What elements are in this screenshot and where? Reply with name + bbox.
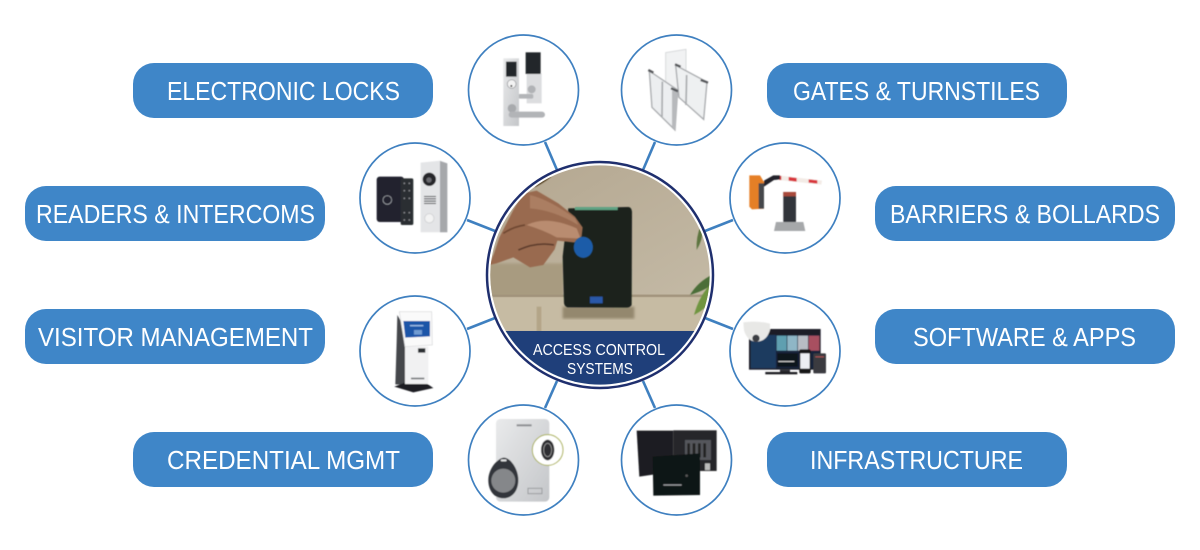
icon circle: software and apps [730,296,840,406]
center photo: hand presenting fob to card reader [480,160,720,391]
label: credential mgmt: CREDENTIAL MGMT [167,445,400,475]
center caption: ACCESS CONTROL [533,342,665,359]
label: readers and intercoms [25,186,325,241]
label: software and apps: SOFTWARE & APPS [913,322,1136,352]
center caption [533,342,665,378]
label: credential mgmt [133,432,433,487]
label: electronic locks: ELECTRONIC LOCKS [167,76,400,106]
icon circle: visitor kiosk [360,296,470,406]
label: readers and intercoms: READERS & INTERCOMS [36,199,315,229]
label: visitor management [25,309,325,364]
label: barriers and bollards [875,186,1175,241]
label: infrastructure [767,432,1067,487]
label: electronic locks [133,63,433,118]
key fob [574,237,593,258]
card reader [563,207,632,308]
hand [489,191,583,267]
icon circle: infrastructure [622,405,732,515]
label: gates and turnstiles [767,63,1067,118]
icon circle: credentials [468,405,578,515]
label: barriers and bollards: BARRIERS & BOLLARDS [890,199,1160,229]
label: infrastructure: INFRASTRUCTURE [810,445,1023,475]
label: gates and turnstiles: GATES & TURNSTILES [793,76,1040,106]
icon circle: barrier and bollard [730,143,840,253]
icon circle: reader and intercom [360,143,470,253]
icon circle: gates and turnstiles [622,35,732,145]
icon circle: electronic lock [468,35,578,145]
label: visitor management: VISITOR MANAGEMENT [38,322,313,352]
navy caption band [506,331,694,385]
label: software and apps [875,309,1175,364]
plant leaves [690,228,710,316]
center caption: SYSTEMS [567,361,633,378]
wall background [490,165,710,334]
connector lines [467,142,733,408]
